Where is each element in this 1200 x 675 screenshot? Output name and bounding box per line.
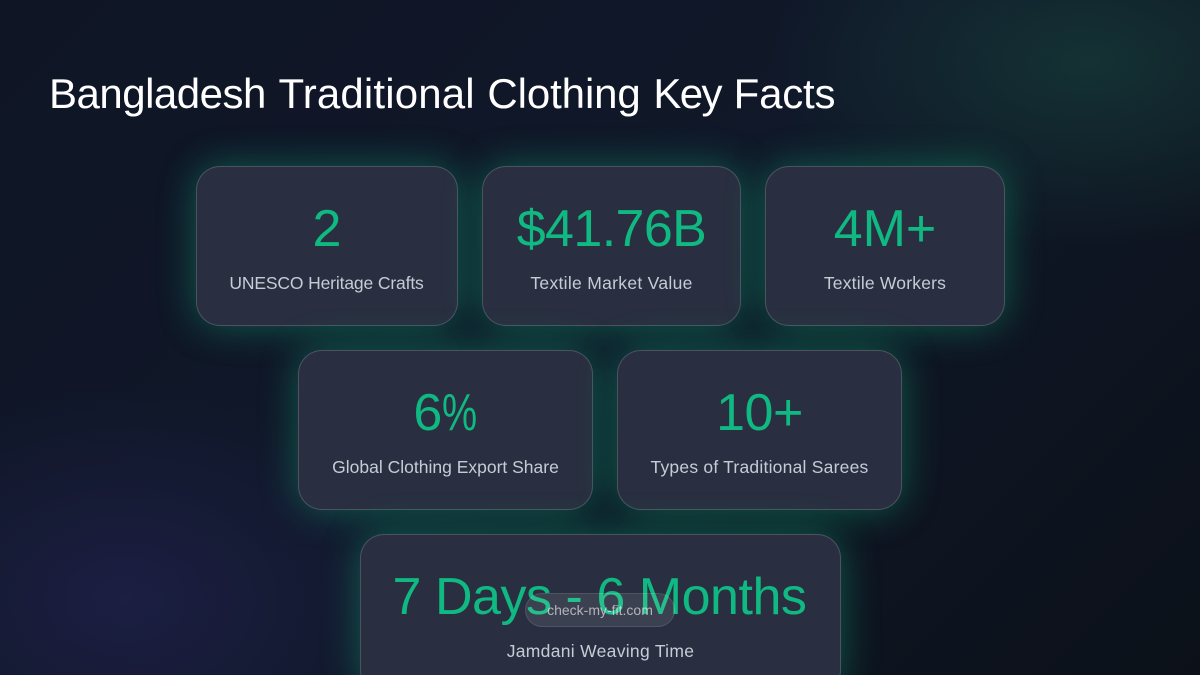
label: textile market value: Textile Market Value bbox=[530, 273, 693, 293]
value: 6% bbox=[413, 384, 477, 442]
value: 10+: 10+ bbox=[716, 384, 803, 442]
label: UNESCO heritage crafts: UNESCO Heritage Crafts bbox=[229, 273, 424, 293]
card: jamdani weaving time bbox=[360, 534, 841, 675]
card: textile market value bbox=[482, 166, 741, 326]
label: textile workers: Textile Workers bbox=[824, 273, 946, 293]
label: types of traditional sarees: Types of Traditional Sarees bbox=[650, 457, 868, 477]
value: 7 Days - 6 Months: 7 Days - 6 Months bbox=[393, 568, 806, 626]
value: 6%: 6 bbox=[413, 384, 442, 442]
value: 6%: % bbox=[442, 384, 477, 442]
value: 4M+: 4M+ bbox=[834, 200, 936, 258]
value: $41.76B: $41.76B bbox=[517, 200, 706, 258]
label: jamdani weaving time: Jamdani Weaving Time bbox=[507, 641, 694, 661]
value: 2: 2 bbox=[313, 200, 341, 258]
title: Bangladesh Traditional Clothing Key Facts bbox=[49, 70, 835, 117]
card: textile workers bbox=[765, 166, 1005, 326]
card: types of traditional sarees bbox=[617, 350, 902, 510]
watermark pill bbox=[525, 593, 675, 627]
watermark pill: check-my-fit.com bbox=[547, 602, 653, 618]
label: global clothing export share: Global Clothing Export Share bbox=[332, 457, 559, 477]
card: UNESCO heritage crafts bbox=[196, 166, 458, 326]
card: global clothing export share bbox=[298, 350, 593, 510]
